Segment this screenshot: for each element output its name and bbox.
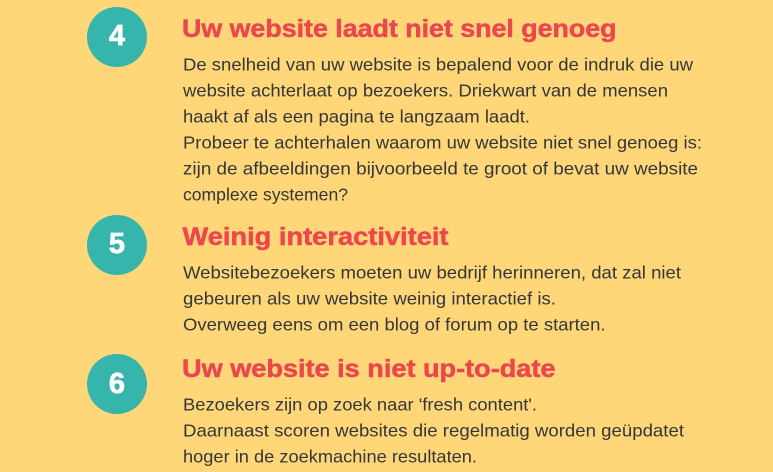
heading: item 4: Uw website laadt niet snel genoeg [182, 15, 616, 43]
text block: item 4: haakt af als een pagina te langzaam laadt. [183, 106, 530, 126]
icon: number 4 badge: 4 [109, 20, 125, 52]
text block: item 4: complexe systemen? [183, 184, 348, 204]
heading: item 6: Uw website is niet up-to-date [182, 355, 556, 383]
text block: item 4 [182, 54, 702, 204]
text block: item 5: Overweeg eens om een blog of forum op te starten. [183, 314, 606, 334]
icon: number 5 badge: 5 [109, 228, 125, 260]
heading: item 5: Weinig interactiviteit [182, 223, 449, 251]
text block: item 6: Daarnaast scoren websites die regelmatig worden geüpdatet [183, 420, 684, 440]
item 4 [87, 7, 702, 204]
text block: item 4: zijn de afbeeldingen bijvoorbeeld te groot of bevat uw website [183, 158, 698, 178]
icon: number 5 badge [87, 215, 147, 275]
item 5 [87, 215, 681, 334]
text block: item 5: Websitebezoekers moeten uw bedrijf herinneren, dat zal niet [183, 262, 681, 282]
icon: number 6 badge: 6 [109, 368, 125, 400]
text block: item 4: De snelheid van uw website is bepalend voor de indruk die uw [183, 54, 693, 74]
icon: number 6 badge [87, 354, 147, 414]
text block: item 5 [183, 262, 681, 334]
text block: item 6 [183, 394, 684, 466]
icon: number 4 badge [87, 7, 147, 67]
text block: item 4: Probeer te achterhalen waarom uw website niet snel genoeg is: [183, 132, 702, 152]
text block: item 6: hoger in de zoekmachine resultaten. [183, 446, 477, 466]
text block: item 6: Bezoekers zijn op zoek naar 'fresh content'. [183, 394, 537, 414]
text block: item 4: website achterlaat op bezoekers. Driekwart van de mensen [182, 80, 668, 100]
text block: item 5: gebeuren als uw website weinig interactief is. [183, 288, 556, 308]
item 6 [87, 354, 684, 466]
